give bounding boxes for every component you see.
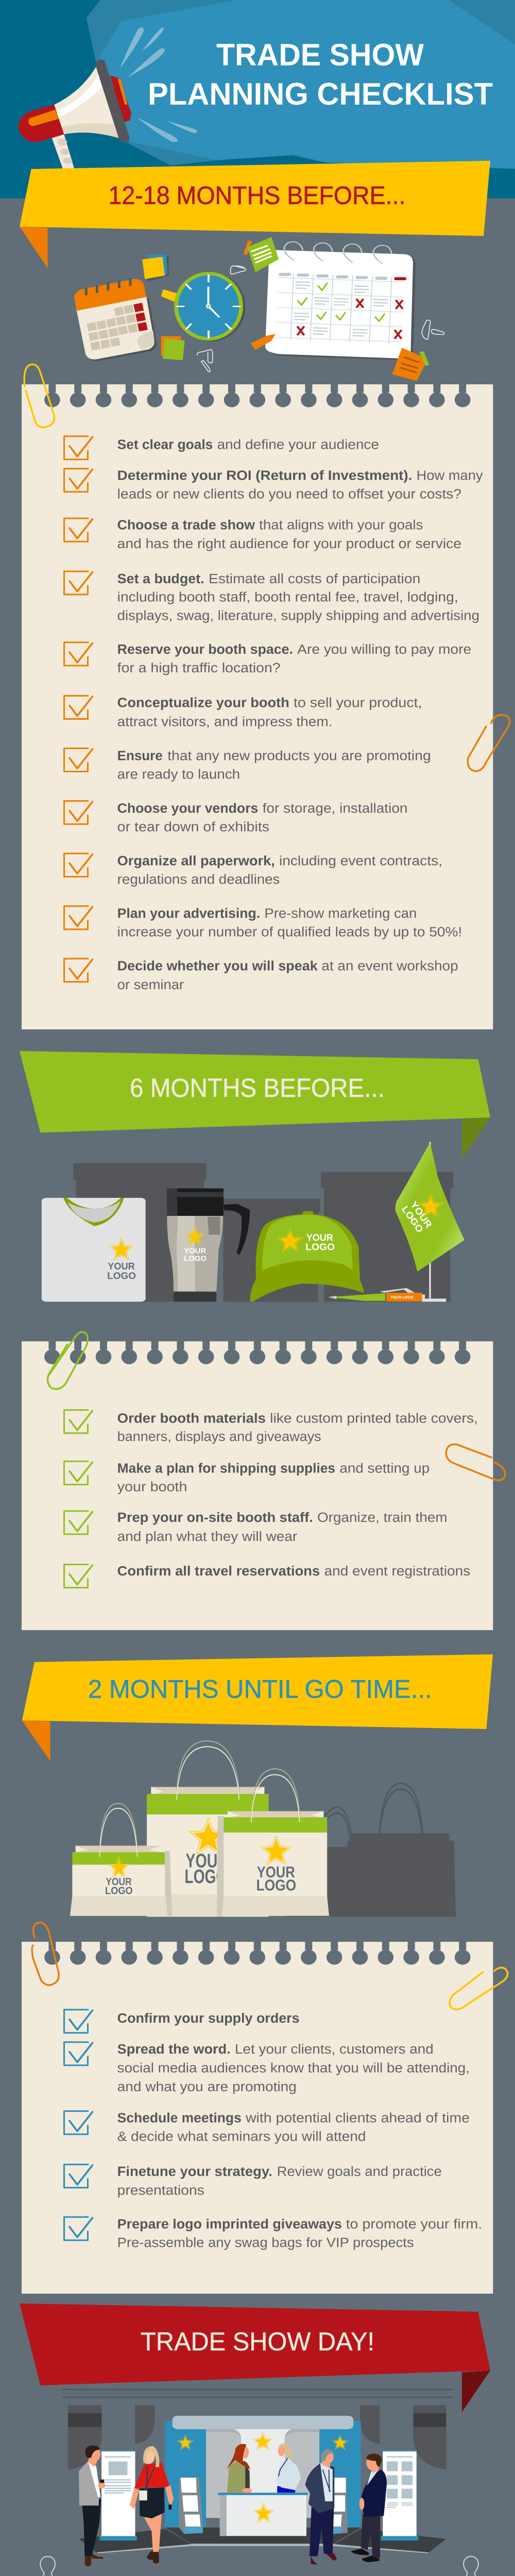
item: plan advertising: Pre-show marketing can — [264, 907, 417, 921]
item: conceptualize booth: to sell your product, — [294, 696, 422, 710]
item: conceptualize booth — [64, 696, 422, 729]
dark background bags — [286, 1783, 456, 1917]
item: decide to speak: or seminar — [117, 978, 184, 992]
item: decide to speak — [64, 959, 458, 992]
baseball cap: LOGO — [305, 1242, 335, 1252]
item: plan advertising: increase your number of qualified leads by up to 50%! — [117, 925, 462, 940]
paper clip: yellow — [450, 1968, 508, 2009]
t-shirt: YOUR — [108, 1261, 135, 1272]
item: decide to speak: Decide whether you will speak — [117, 959, 318, 974]
travel mug: LOGO — [184, 1255, 207, 1263]
item: spread the word: Let your clients, customers and — [235, 2042, 434, 2057]
item: choose vendors: or tear down of exhibits — [117, 820, 269, 834]
flag — [396, 1142, 465, 1302]
paper clip: orange — [446, 1444, 505, 1480]
item: finetune strategy: Review goals and practice — [277, 2164, 442, 2179]
icon: wall calendar — [243, 237, 429, 381]
item: conceptualize booth: attract visitors, and impress them. — [117, 715, 332, 729]
binder clip right — [451, 2556, 491, 2576]
item: order booth materials: banners, displays and giveaways — [117, 1430, 321, 1444]
item: prep staff: Prep your on-site booth staff. — [117, 1511, 313, 1525]
illustration: calendars and clock — [74, 237, 444, 381]
small bag — [70, 1803, 172, 1916]
small bag: YOUR — [106, 1875, 132, 1887]
item: prepare giveaways: Prepare logo imprinted giveaways — [117, 2217, 342, 2231]
item: determine ROI — [64, 469, 483, 502]
item: finetune strategy: presentations — [117, 2183, 204, 2198]
item: confirm supply orders — [64, 2010, 300, 2033]
medium bag: LOGO — [256, 1876, 296, 1894]
illustration: logo tote bags — [70, 1741, 456, 1917]
banner: 12-18 months before — [20, 161, 490, 268]
paper clip: green — [47, 1332, 88, 1389]
item: schedule meetings — [64, 2111, 470, 2144]
item: shipping supplies — [64, 1461, 430, 1494]
item: confirm travel: and event registrations — [324, 1564, 470, 1579]
item: prep staff: Organize, train them — [317, 1511, 448, 1525]
item: reserve booth space: for a high traffic location? — [117, 661, 281, 675]
banner: 2 months until go time: 2 MONTHS UNTIL GO TIME... — [88, 1674, 432, 1703]
banner: 12-18 months before: 12-18 MONTHS BEFORE... — [108, 182, 406, 210]
person: woman at desk right — [277, 2443, 301, 2493]
pen: YOUR LOGO — [390, 1296, 414, 1300]
large bag: LOGO — [184, 1866, 227, 1888]
item: prep staff: and plan what they will wear — [117, 1530, 298, 1544]
item: organize paperwork: regulations and deadlines — [117, 872, 280, 887]
item: reserve booth space — [64, 642, 471, 675]
baseball cap — [250, 1211, 364, 1302]
person: woman at desk left — [226, 2444, 252, 2493]
item: confirm supply orders: Confirm your supply orders — [117, 2011, 300, 2026]
panel: 12-18 months checklist — [22, 364, 510, 1029]
item: prepare giveaways: Pre-assemble any swag bags for VIP prospects — [117, 2235, 414, 2250]
item: choose a trade show: and has the right audience for your product or service — [117, 537, 461, 551]
medium bag — [217, 1769, 329, 1917]
item: determine ROI: Determine your ROI (Return of Investment). — [117, 469, 412, 483]
item: finetune strategy — [64, 2164, 442, 2198]
panel: trade show day checklist — [22, 2556, 493, 2576]
item: shipping supplies: and setting up — [339, 1462, 430, 1476]
small bag: LOGO — [105, 1885, 133, 1896]
item: ensure products — [64, 748, 431, 782]
item: organize paperwork — [64, 854, 442, 887]
item: spread the word: and what you are promoting — [117, 2080, 297, 2094]
person: man in dark blazer — [351, 2454, 387, 2562]
item: set clear goals — [64, 436, 379, 460]
roll-up banner left — [99, 2451, 137, 2540]
paper clip: orange — [32, 1923, 59, 1985]
illustration: trade show booth — [62, 2389, 453, 2567]
roll-up banner right — [381, 2451, 418, 2540]
booth back wall — [165, 2416, 361, 2527]
icon: megaphone — [18, 27, 197, 176]
item: choose a trade show — [64, 518, 461, 551]
item: ensure products: are ready to launch — [117, 767, 240, 782]
flag logo text: YOUR — [408, 1199, 434, 1230]
person: man in grey blazer — [79, 2446, 105, 2567]
travel mug — [167, 1189, 250, 1302]
item: set a budget: displays, swag, literature, supply shipping and advertising — [117, 609, 479, 623]
item: set a budget: Set a budget. — [117, 572, 204, 586]
item: ensure products: Ensure — [117, 749, 163, 764]
item: order booth materials: like custom printed table covers, — [270, 1411, 478, 1426]
booth floor — [79, 2528, 446, 2553]
item: set a budget — [64, 571, 479, 623]
item: order booth materials: Order booth materials — [117, 1411, 266, 1426]
item: spread the word — [64, 2042, 470, 2094]
flag logo text — [400, 1199, 434, 1234]
panel: 6 months checklist — [22, 1332, 505, 1630]
item: reserve booth space: Reserve your booth space. — [117, 642, 293, 657]
baseball cap: YOUR — [306, 1232, 333, 1243]
travel mug: YOUR — [184, 1247, 206, 1255]
paper clip: orange — [468, 715, 510, 771]
item: shipping supplies: Make a plan for shipping supplies — [117, 1462, 335, 1476]
item: schedule meetings: Schedule meetings — [117, 2111, 242, 2126]
icon: desk calendar — [74, 278, 157, 361]
header background — [0, 0, 515, 198]
pen — [328, 1288, 425, 1301]
item: set a budget: Estimate all costs of participation — [209, 572, 420, 586]
item: prepare giveaways — [64, 2217, 482, 2250]
reception desk — [218, 2493, 307, 2536]
title: TRADE SHOW — [216, 38, 424, 72]
brochure racks — [179, 2477, 348, 2534]
item: organize paperwork: including event contracts, — [279, 854, 442, 869]
banner: trade show day — [20, 2303, 490, 2412]
background boxes — [73, 1163, 453, 1302]
item: confirm travel — [64, 1564, 470, 1588]
item: order booth materials — [64, 1410, 478, 1444]
item: set a budget: including booth staff, booth rental fee, travel, lodging, — [117, 590, 458, 605]
item: plan advertising — [64, 906, 462, 940]
item: prep staff — [64, 1511, 448, 1544]
banner: trade show day: TRADE SHOW DAY! — [141, 2327, 374, 2356]
item: decide to speak: at an event workshop — [321, 959, 458, 974]
medium bag: YOUR — [257, 1863, 295, 1880]
banner: 2 months until go time — [22, 1654, 493, 1761]
item: choose a trade show: that aligns with your goals — [259, 518, 423, 532]
item: choose vendors: for storage, installation — [263, 802, 408, 816]
item: finetune strategy: Finetune your strategy. — [117, 2164, 272, 2179]
t-shirt: LOGO — [107, 1270, 136, 1281]
item: schedule meetings: & decide what seminars you will attend — [117, 2130, 366, 2144]
item: reserve booth space: Are you willing to pay more — [297, 642, 471, 657]
item: determine ROI: How many — [417, 469, 483, 483]
illustration: branded products — [42, 1142, 465, 1302]
venue lines and curtains — [62, 2389, 453, 2469]
person: woman in red blouse — [130, 2446, 174, 2564]
title: PLANNING CHECKLIST — [148, 77, 493, 111]
item: plan advertising: Plan your advertising. — [117, 907, 260, 921]
item: choose a trade show: Choose a trade show — [117, 518, 255, 532]
flag logo text: LOGO — [400, 1204, 425, 1234]
large bag: YOUR — [185, 1851, 228, 1872]
item: ensure products: that any new products you are promoting — [167, 749, 431, 764]
item: spread the word: Spread the word. — [117, 2042, 231, 2057]
item: spread the word: social media audiences know that you will be attending, — [117, 2061, 470, 2075]
item: determine ROI: leads or new clients do you need to offset your costs? — [117, 487, 461, 502]
banner: 6 months before: 6 MONTHS BEFORE... — [130, 1073, 385, 1103]
item: conceptualize booth: Conceptualize your booth — [117, 696, 289, 710]
icon: clock — [174, 272, 246, 342]
binder clip left — [28, 2556, 67, 2576]
title — [148, 38, 493, 111]
paper clip: yellow — [24, 364, 54, 427]
sticky notes — [142, 255, 187, 360]
large bag — [147, 1741, 269, 1917]
item: set clear goals: Set clear goals — [117, 438, 213, 452]
item: confirm travel: Confirm all travel reservations — [117, 1564, 320, 1579]
item: set clear goals: and define your audience — [217, 438, 379, 452]
item: schedule meetings: with potential clients ahead of time — [245, 2111, 470, 2126]
item: prepare giveaways: to promote your firm. — [346, 2217, 482, 2231]
item: shipping supplies: your booth — [117, 1480, 187, 1494]
panel: 2 months checklist — [22, 1923, 508, 2294]
icon: paper clips — [197, 266, 444, 372]
item: organize paperwork: Organize all paperwork, — [117, 854, 275, 869]
t-shirt — [42, 1198, 146, 1302]
banner: 6 months before — [20, 1051, 490, 1159]
person: man in navy suit — [305, 2449, 337, 2565]
item: choose vendors — [64, 801, 408, 834]
item: choose vendors: Choose your vendors — [117, 802, 258, 816]
